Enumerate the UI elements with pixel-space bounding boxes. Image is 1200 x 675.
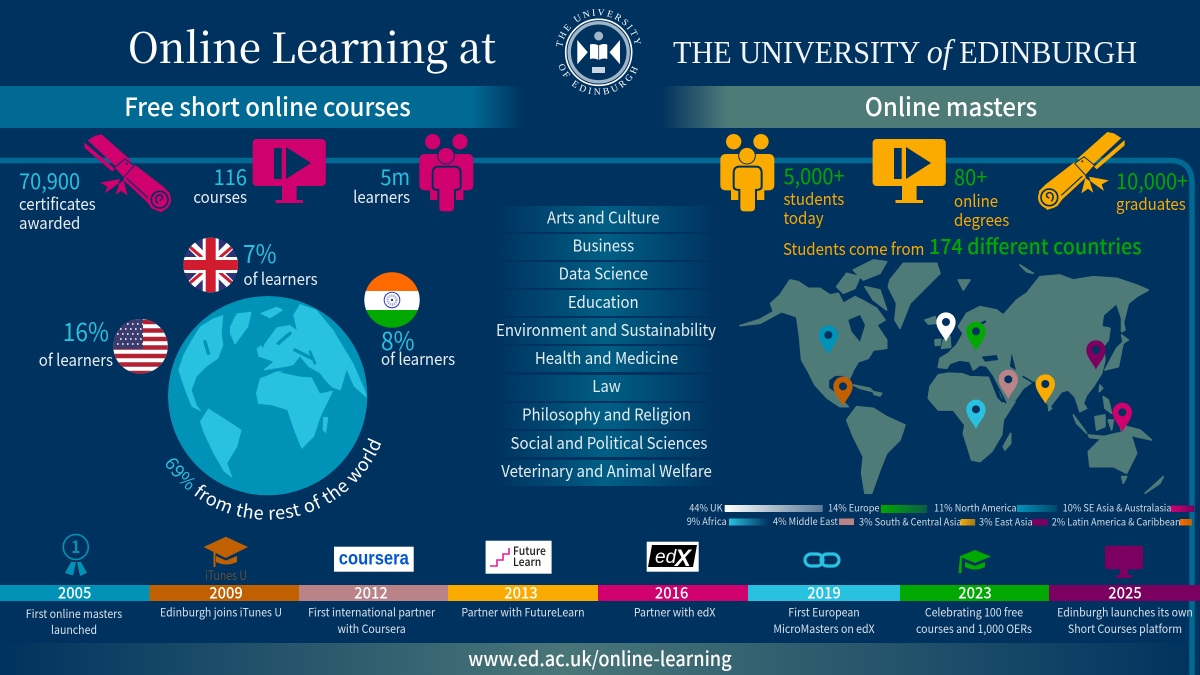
footer URL band bbox=[0, 643, 1200, 675]
icon: first award ribbon bbox=[63, 533, 88, 576]
icon: degrees monitor bbox=[873, 139, 946, 203]
logo: edX: X bbox=[673, 545, 693, 572]
timeline 2019: 2019 bbox=[807, 581, 841, 604]
subject list: Arts and Culture bbox=[547, 205, 660, 229]
panel header: free short online courses: Free short online courses bbox=[124, 88, 411, 124]
subject list: Environment and Sustainability bbox=[496, 317, 716, 341]
stat: certificates awarded: 70,900 bbox=[19, 165, 80, 196]
stat: students today bbox=[784, 160, 845, 229]
subject list: Education bbox=[568, 289, 639, 313]
stat: courses: 116 bbox=[214, 161, 247, 192]
map legend: 9% Africa bbox=[687, 514, 727, 528]
timeline 2009: 2009 bbox=[209, 581, 243, 604]
timeline 2019: MicroMasters on edX bbox=[773, 621, 875, 637]
subject list: Law bbox=[592, 373, 621, 397]
icon: certificate scroll bbox=[84, 134, 171, 212]
countries headline bbox=[783, 229, 1142, 260]
timeline 2016: 2016 bbox=[655, 581, 689, 604]
stat: online degrees: online bbox=[954, 188, 998, 212]
subject list bbox=[495, 205, 717, 486]
icon: first award ribbon: 1 bbox=[71, 533, 80, 558]
timeline 2013: 2013 bbox=[504, 581, 538, 604]
globe bbox=[168, 296, 367, 495]
timeline 2013: Partner with FutureLearn bbox=[461, 604, 585, 621]
icon: learners group bbox=[419, 134, 473, 212]
panel header: online masters bbox=[662, 86, 1200, 128]
stat: India learners bbox=[381, 321, 455, 370]
stat: UK learners: of learners bbox=[243, 266, 318, 290]
flag: USA bbox=[113, 319, 169, 375]
icon: course monitor bbox=[253, 139, 326, 203]
stat: online degrees bbox=[954, 161, 1009, 231]
map legend: 10% SE Asia & Australasia bbox=[1063, 500, 1171, 515]
stat: learners: learners bbox=[353, 184, 410, 208]
timeline 2019 bbox=[748, 581, 900, 637]
stat: USA learners bbox=[39, 312, 113, 371]
subject list: Social and Political Sciences bbox=[511, 430, 707, 454]
stat: online degrees: 80+ bbox=[954, 161, 987, 192]
stat: students today: 5,000+ bbox=[783, 160, 845, 191]
timeline 2016: Partner with edX bbox=[634, 604, 716, 621]
flag: UK bbox=[183, 237, 239, 293]
stat: graduates: graduates bbox=[1116, 191, 1186, 215]
subject list: Philosophy and Religion bbox=[522, 402, 691, 426]
map legend: 3% South & Central Asia bbox=[859, 514, 962, 529]
countries headline: Students come from bbox=[783, 236, 924, 260]
map pin: North America bbox=[819, 325, 838, 355]
timeline 2023: courses and 1,000 OERs bbox=[916, 621, 1032, 637]
timeline 2023 bbox=[900, 581, 1049, 637]
logo: edX bbox=[647, 542, 699, 572]
icon: chain link bbox=[805, 554, 839, 566]
stat: India learners: of learners bbox=[381, 346, 455, 370]
logo: edX: ed bbox=[655, 547, 678, 568]
logo: FutureLearn bbox=[486, 541, 552, 574]
map pin: UK bbox=[936, 312, 956, 342]
countries headline: 174 different countries bbox=[929, 229, 1142, 260]
stat: courses: courses bbox=[193, 184, 247, 208]
stat: learners bbox=[353, 161, 410, 208]
stat: students today: today bbox=[783, 205, 824, 229]
subject list: Business bbox=[572, 233, 634, 257]
map legend: 14% Europe bbox=[828, 500, 880, 515]
map pin: South and Central Asia bbox=[1036, 374, 1055, 404]
map legend: 44% UK bbox=[689, 500, 723, 515]
subject list: Data Science bbox=[559, 261, 648, 285]
stat: learners: 5m bbox=[380, 161, 410, 192]
timeline 2012: First international partner bbox=[308, 604, 436, 621]
timeline 2012: with Coursera bbox=[337, 621, 406, 637]
stat: certificates awarded bbox=[19, 165, 96, 234]
stat: graduates: 10,000+ bbox=[1116, 165, 1188, 196]
icon: graduates scroll bbox=[1038, 132, 1125, 210]
map pin: Africa bbox=[966, 400, 986, 429]
university seal: OF EDINBURGH bbox=[559, 64, 638, 95]
stat: students today: students bbox=[783, 186, 844, 210]
icon: iTunes U cap: iTunes U bbox=[205, 566, 247, 584]
stat: certificates awarded: certificates bbox=[19, 191, 96, 215]
map pin: East Asia bbox=[1086, 340, 1106, 370]
stat: online degrees: degrees bbox=[954, 207, 1009, 231]
logo: FutureLearn: Future bbox=[513, 542, 546, 559]
logo: Coursera: coursera bbox=[339, 548, 409, 570]
panel header: free short online courses bbox=[0, 86, 522, 128]
timeline 2019: First European bbox=[788, 604, 860, 621]
map legend: 11% North America bbox=[934, 500, 1017, 515]
panel header: online masters: Online masters bbox=[865, 88, 1037, 124]
world map bbox=[740, 260, 1163, 493]
map pin: SE Asia and Australasia bbox=[1113, 403, 1132, 432]
timeline 2013 bbox=[448, 581, 598, 621]
stat: UK learners: 7% bbox=[243, 234, 277, 270]
timeline 2025: 2025 bbox=[1108, 581, 1142, 604]
university seal bbox=[556, 9, 641, 95]
flag: India bbox=[364, 272, 420, 329]
footer URL band: www.ed.ac.uk/online-learning bbox=[468, 643, 732, 672]
stat: UK learners bbox=[243, 234, 318, 290]
map legend: 4% Middle East bbox=[773, 514, 838, 528]
map pin: Europe bbox=[966, 322, 986, 351]
subject list: Health and Medicine bbox=[535, 345, 678, 369]
university seal: THE UNIVERSITY bbox=[556, 9, 641, 46]
timeline 2023: 2023 bbox=[958, 581, 992, 604]
stat: India learners: 8% bbox=[381, 321, 415, 357]
timeline 2012: 2012 bbox=[354, 581, 388, 604]
timeline 2009: Edinburgh joins iTunes U bbox=[160, 604, 282, 621]
logo: FutureLearn: Learn bbox=[513, 553, 541, 570]
title: Online Learning at bbox=[128, 16, 496, 76]
map pin: Latin America bbox=[833, 377, 853, 406]
timeline 2005: launched bbox=[51, 622, 97, 638]
timeline 2025: Edinburgh launches its own bbox=[1057, 604, 1193, 621]
timeline 2005 bbox=[0, 581, 150, 638]
stat: USA learners: of learners bbox=[39, 347, 113, 371]
map legend: 3% East Asia bbox=[979, 514, 1033, 529]
university wordmark: THE UNIVERSITY of EDINBURGH bbox=[673, 34, 1137, 71]
subject list: Veterinary and Animal Welfare bbox=[501, 458, 712, 482]
timeline 2025 bbox=[1049, 581, 1200, 637]
stat: graduates bbox=[1116, 165, 1188, 215]
timeline 2005: First online masters bbox=[26, 606, 122, 622]
map legend: 2% Latin America & Caribbean bbox=[1052, 514, 1181, 529]
icon: green graduation cap bbox=[958, 550, 991, 573]
stat: courses bbox=[193, 161, 247, 208]
timeline 2012 bbox=[299, 581, 448, 637]
icon: students group bbox=[720, 134, 774, 212]
globe caption: 69% from the rest of the world bbox=[166, 438, 382, 520]
timeline 2025: Short Courses platform bbox=[1068, 621, 1182, 637]
stat: USA learners: 16% bbox=[63, 312, 109, 348]
map pin: Middle East bbox=[999, 370, 1018, 399]
timeline 2016 bbox=[598, 581, 748, 621]
map legend bbox=[687, 500, 1194, 529]
timeline 2009 bbox=[150, 581, 299, 621]
timeline 2005: 2005 bbox=[58, 581, 91, 604]
icon: iTunes U cap bbox=[204, 537, 248, 584]
icon: platform monitor bbox=[1105, 546, 1143, 578]
timeline 2023: Celebrating 100 free bbox=[925, 604, 1023, 621]
frame line bbox=[0, 160, 1192, 675]
stat: certificates awarded: awarded bbox=[19, 210, 80, 234]
